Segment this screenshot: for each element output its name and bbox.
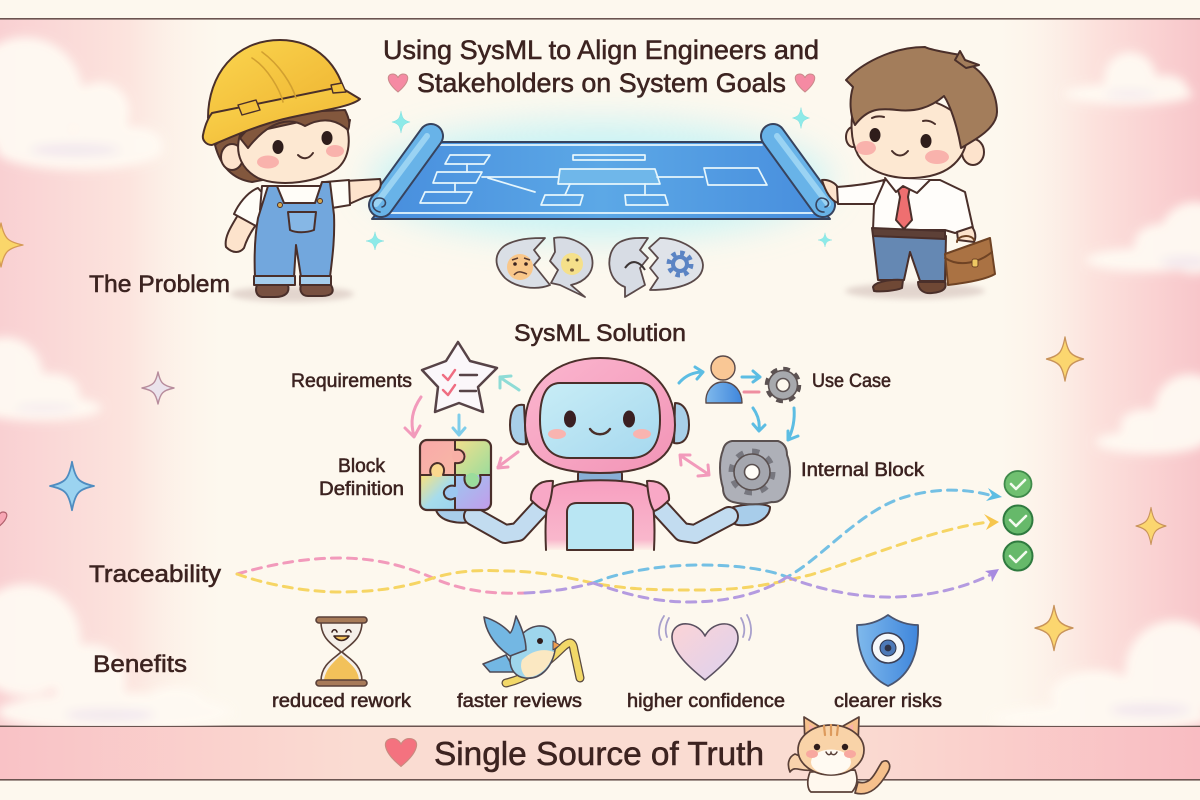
label: Block Definition: Block xyxy=(338,456,385,477)
cyan sparkles xyxy=(366,108,832,250)
footer banner xyxy=(0,727,1200,781)
robot xyxy=(436,358,770,550)
banner band xyxy=(0,727,1200,779)
icon: title heart right xyxy=(795,74,815,92)
head xyxy=(798,725,864,775)
cheek left xyxy=(856,141,876,155)
mouth xyxy=(826,752,837,755)
right forearm and hand xyxy=(345,179,381,205)
collar xyxy=(885,178,930,193)
left arm xyxy=(226,215,258,252)
icon: hourglass xyxy=(316,617,367,686)
label: Requirements: Requirements xyxy=(291,371,412,392)
arrow: gear to internal block xyxy=(788,408,798,440)
body fill xyxy=(546,480,654,550)
icon: bird belly xyxy=(521,650,554,677)
inner ears xyxy=(809,724,853,734)
eye right xyxy=(322,131,332,145)
blueprint left roller xyxy=(373,136,431,212)
ground shadow xyxy=(230,286,354,302)
status checks xyxy=(1004,471,1032,570)
face xyxy=(238,113,349,183)
path: purple to third check xyxy=(787,573,994,597)
arrow: person to gear xyxy=(742,371,760,382)
icon: bird tail xyxy=(483,655,516,672)
shoes xyxy=(873,280,946,293)
benefit: reduced rework xyxy=(272,617,412,712)
stakeholder character xyxy=(822,47,997,299)
icon: bird eye xyxy=(537,638,543,644)
arrow: robot and internal block two-way xyxy=(680,455,709,476)
bubble 1 xyxy=(497,238,550,288)
label: Benefits: Benefits xyxy=(93,651,187,678)
body xyxy=(808,770,857,792)
link: person to gear, pink xyxy=(744,390,759,394)
frown mark xyxy=(625,262,645,270)
mouth xyxy=(298,153,313,158)
right arm xyxy=(660,508,729,534)
icon: use case gear xyxy=(768,370,798,400)
icon: tape measure xyxy=(506,643,580,683)
label: SysML Solution: SysML Solution xyxy=(514,320,686,347)
arrow: robot to block xyxy=(498,452,518,468)
cheek right xyxy=(844,750,856,758)
icon: use case person xyxy=(706,356,742,403)
icon: bird beak xyxy=(553,641,560,650)
label: Block Definition: Definition xyxy=(319,479,404,500)
eye left xyxy=(564,410,576,428)
left arm xyxy=(473,508,540,534)
labels: solution diagrams xyxy=(291,371,925,500)
eye right xyxy=(623,410,635,428)
trousers xyxy=(873,236,946,281)
blueprint diagram lines xyxy=(385,145,815,213)
cloud: upper left xyxy=(0,37,164,170)
checklist marks xyxy=(443,370,477,395)
right hand xyxy=(727,504,770,525)
arrowhead: purple xyxy=(985,569,999,582)
label: Traceability: Traceability xyxy=(89,561,221,588)
check 2 xyxy=(1004,506,1032,534)
tie xyxy=(896,187,912,229)
traceability arrowheads xyxy=(984,488,1002,582)
overalls pocket xyxy=(288,212,316,232)
blueprint right roller xyxy=(773,136,828,212)
hard hat dome xyxy=(208,40,345,122)
banner lower rule xyxy=(0,779,1200,781)
face xyxy=(852,95,967,178)
left sleeve xyxy=(837,180,884,204)
cloud: middle right xyxy=(1095,374,1200,454)
bubble 3 xyxy=(609,238,648,297)
icon: shield xyxy=(857,615,918,686)
hair back xyxy=(215,118,350,182)
cloud: lower right xyxy=(990,620,1200,732)
right ear xyxy=(674,403,689,443)
cheek right xyxy=(326,145,344,157)
cheek left xyxy=(806,750,818,758)
sparkle: right gold middle xyxy=(1136,508,1166,544)
title xyxy=(383,35,819,98)
raised paw xyxy=(788,754,815,772)
hard hat ridge xyxy=(252,52,296,102)
arrow: robot to requirements xyxy=(500,376,519,390)
icon: bird body xyxy=(510,626,556,678)
label: Internal Block: Internal Block xyxy=(801,460,925,481)
tail xyxy=(855,761,890,794)
traceability paths xyxy=(237,490,994,602)
decorative sparkles xyxy=(0,223,1166,650)
overalls xyxy=(255,182,334,277)
blueprint scroll xyxy=(366,108,832,250)
left hand xyxy=(822,180,838,203)
engineer character xyxy=(203,40,381,302)
briefcase xyxy=(945,236,995,285)
right shoulder xyxy=(647,481,669,511)
label: higher confidence xyxy=(627,691,785,712)
eye left xyxy=(870,128,880,142)
icon: requirements star xyxy=(422,342,497,412)
icon: bird wing xyxy=(484,616,526,656)
ear xyxy=(221,144,243,170)
cheek left xyxy=(257,156,279,168)
sparkle: right gold top xyxy=(1046,337,1084,381)
muzzle xyxy=(811,750,851,774)
label: clearer risks xyxy=(834,691,942,712)
heart: left edge xyxy=(0,512,7,526)
sparkle: left gold xyxy=(0,223,23,267)
arrow: robot to person xyxy=(679,367,703,383)
arrowhead: yellow xyxy=(984,514,999,530)
left ear stub xyxy=(846,127,860,147)
chest screen xyxy=(567,503,633,550)
right hand xyxy=(957,227,975,242)
mouth xyxy=(590,429,610,434)
stripes xyxy=(824,725,838,735)
left sleeve xyxy=(234,188,272,226)
icon: eye xyxy=(872,633,904,663)
brow left xyxy=(872,116,884,118)
eye right xyxy=(842,744,848,750)
path: blue upper xyxy=(593,490,993,583)
path: purple joining xyxy=(525,583,593,593)
benefit: clearer risks xyxy=(834,615,942,712)
strap buttons xyxy=(278,202,282,208)
eye left xyxy=(272,140,284,154)
hat clip left xyxy=(238,100,260,115)
blueprint sheet xyxy=(372,142,830,219)
diagram arrows xyxy=(405,367,798,476)
label: faster reviews xyxy=(457,691,582,712)
boots xyxy=(256,285,333,297)
arrow: requirements to block, blue xyxy=(453,415,465,435)
sparkle: pale pink xyxy=(142,372,174,404)
hard hat brim xyxy=(203,87,360,145)
cloud: right xyxy=(1085,202,1200,274)
cloud: upper right xyxy=(1063,52,1193,105)
bubble 2 xyxy=(550,237,593,297)
sparkle: blue xyxy=(50,462,94,510)
path: yellow xyxy=(237,522,988,592)
overalls cuffs xyxy=(254,276,331,285)
icon: confidence waves xyxy=(659,615,751,640)
title line 1: Using SysML to Align Engineers and xyxy=(383,35,819,65)
hair fringe xyxy=(240,110,349,148)
icon: puzzle block xyxy=(420,440,491,510)
brow right xyxy=(923,121,935,124)
arrow: person to internal block xyxy=(753,408,765,431)
arrow: requirements to block, pink xyxy=(405,397,421,437)
cloud: middle left xyxy=(0,337,102,421)
benefit: higher confidence xyxy=(627,615,785,712)
hair xyxy=(846,47,997,148)
ears xyxy=(804,717,859,745)
title line 2: Stakeholders on System Goals xyxy=(417,68,786,98)
ground shadow xyxy=(845,283,985,299)
puzzle seams xyxy=(420,440,491,510)
mouth xyxy=(892,151,908,156)
cloud: lower left xyxy=(0,584,233,732)
benefit: faster reviews xyxy=(457,616,582,712)
belt xyxy=(872,228,945,239)
left hand xyxy=(436,510,477,523)
shirt body xyxy=(873,180,973,233)
left shoulder xyxy=(531,481,553,511)
check 1 xyxy=(1004,471,1032,497)
label: Block Definition xyxy=(319,456,404,500)
glow behind blueprint xyxy=(370,122,830,238)
icon: banner heart xyxy=(385,738,417,766)
right sleeve xyxy=(325,180,350,208)
cheek right xyxy=(925,150,949,164)
path: pink xyxy=(237,558,525,593)
left ear xyxy=(510,405,526,444)
broken speech bubbles xyxy=(497,237,703,297)
thinking face xyxy=(561,253,583,275)
hat clip right xyxy=(331,83,346,93)
banner text: Single Source of Truth xyxy=(434,735,764,772)
ear xyxy=(962,139,984,165)
label: reduced rework xyxy=(272,691,412,712)
icon: internal block gear xyxy=(720,441,790,504)
icon: title heart left xyxy=(388,74,408,92)
arrowhead: blue xyxy=(986,488,1002,501)
neck xyxy=(578,470,622,484)
check 3 xyxy=(1004,542,1032,570)
worried face xyxy=(507,254,533,280)
eye right xyxy=(920,134,932,148)
cat mascot xyxy=(788,717,890,794)
label: The Problem: The Problem xyxy=(89,271,230,298)
cheek right xyxy=(633,429,651,439)
shirt xyxy=(260,186,330,210)
head shell xyxy=(525,358,675,473)
blue gear xyxy=(669,253,691,275)
path: purple lower xyxy=(593,577,787,602)
strap button xyxy=(318,198,322,204)
bubble 4 xyxy=(649,238,703,290)
hair tuft xyxy=(955,51,979,68)
eye left xyxy=(814,744,820,750)
label: Use Case: Use Case xyxy=(812,371,891,392)
sparkle: right gold lower xyxy=(1035,606,1073,650)
icon: pastel heart xyxy=(672,624,738,680)
face screen xyxy=(540,383,660,458)
body outline xyxy=(546,480,654,550)
cheek left xyxy=(548,429,566,439)
